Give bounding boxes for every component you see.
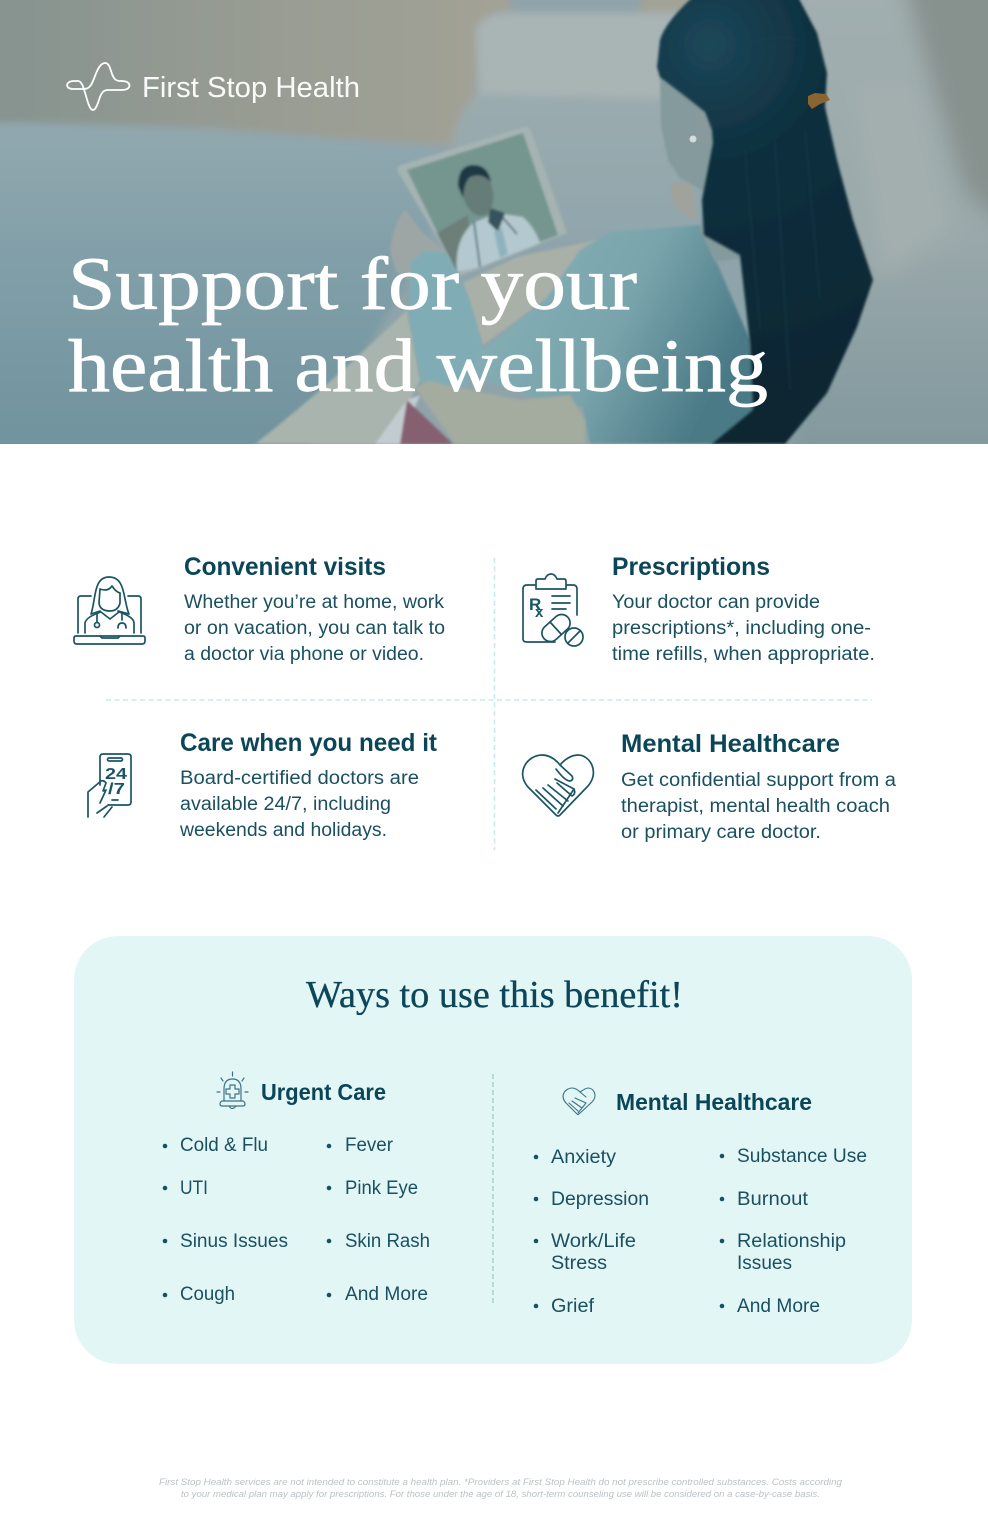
column heading: Mental Healthcare [616,1089,812,1115]
logo [67,63,360,110]
hair clip [808,93,830,109]
list: Skin Rash [345,1231,430,1252]
column heading: Urgent Care [261,1079,386,1105]
text block: therapist, mental health coach [621,796,890,817]
list: Substance Use [737,1146,867,1167]
text block: time refills, when appropriate. [612,644,875,665]
list [163,1135,430,1305]
list: Relationship [737,1231,846,1252]
list: Fever [345,1135,394,1156]
icon: phone with 24/7: 24 [105,766,127,783]
icon label: Rx: R [529,595,541,614]
sweater [410,225,755,444]
text block: weekends and holidays. [179,820,387,841]
column divider [492,1074,494,1304]
text block [621,770,896,843]
footnote [159,1477,842,1499]
list: Anxiety [551,1147,617,1168]
list: UTI [180,1178,208,1199]
hair [657,0,873,444]
list: And More [345,1284,428,1305]
footnote: to your medical plan may apply for prescriptions. For those under the age of 18, short-term counseling use will be considered on a case-by-case basis. [181,1489,820,1499]
icon: phone with 24/7 [88,754,131,817]
heading: Care when you need it [180,729,438,757]
list: Issues [737,1253,792,1274]
text block: available 24/7, including [180,794,391,815]
feature: convenient visits [74,553,445,665]
icon: alert bell [217,1072,248,1108]
feature: care when you need it [88,729,438,841]
hand [390,210,446,280]
heading: Prescriptions [612,553,770,581]
text block: prescriptions*, including one- [612,618,871,639]
panel background [74,936,912,1364]
feature: mental healthcare [523,730,896,843]
title: Support for your [68,243,637,326]
text block: or on vacation, you can talk to [184,618,445,639]
logo wordmark: First Stop Health [142,72,360,104]
heading: Mental Healthcare [621,730,840,758]
icon: phone with 24/7: /7 [108,781,125,798]
panel: ways to use this benefit [74,936,912,1364]
list: Stress [551,1253,607,1274]
panel heading: Ways to use this benefit! [306,974,683,1016]
icon label: x: x [535,604,544,621]
icon: heart handshake [523,755,593,816]
list: Sinus Issues [180,1231,288,1252]
text block [179,768,419,841]
list [534,1146,867,1317]
list: Burnout [737,1189,809,1210]
heading: Convenient visits [184,553,386,581]
list: Depression [551,1189,649,1210]
face and neck [660,75,745,262]
earring [690,136,696,142]
icon: small heart handshake [563,1088,595,1114]
text block: Your doctor can provide [612,592,820,613]
mental healthcare column [534,1088,867,1317]
logo pulse icon [67,63,130,110]
text block: Get confidential support from a [621,770,896,791]
hero photo: woman on sofa in a video visit [0,0,988,470]
urgent care column [163,1072,430,1305]
icon: prescription clipboard [523,574,583,646]
list: Cold & Flu [180,1135,268,1156]
text block [184,592,445,665]
title: health and wellbeing [68,325,768,408]
title [68,243,768,408]
list: Pink Eye [345,1178,418,1199]
text block: a doctor via phone or video. [184,644,424,665]
blanket [255,240,720,444]
text block: or primary care doctor. [621,822,821,843]
list: And More [737,1296,820,1317]
icon: doctor on laptop [74,577,145,644]
feature: prescriptions [523,553,875,665]
list: Work/Life [551,1231,636,1252]
footnote: First Stop Health services are not intended to constitute a health plan. *Providers at First Stop Health do not prescribe controlled substances. Costs according [159,1477,842,1487]
tablet [397,127,567,276]
text block [612,592,875,665]
text block: Whether you’re at home, work [184,592,444,613]
text block: Board-certified doctors are [180,768,419,789]
list: Cough [180,1284,235,1305]
feature grid dividers [106,558,872,850]
front blanket fold [415,381,585,444]
list: Grief [551,1296,595,1317]
